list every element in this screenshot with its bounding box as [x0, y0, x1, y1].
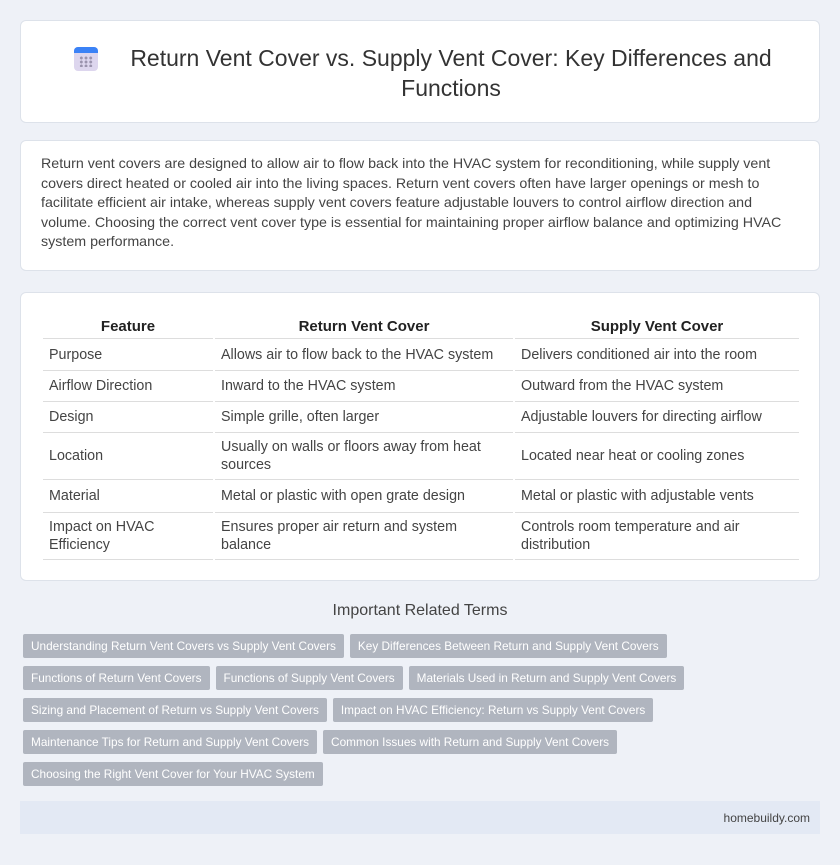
intro text: Return vent covers are designed to allow air to flow back into the HVAC system for reconditioning, while supply vent [41, 156, 770, 172]
comparison table panel: Ensures proper air return and system balance [221, 519, 457, 553]
comparison table panel: Delivers conditioned air into the room [521, 346, 757, 362]
comparison table panel: Material [49, 488, 100, 504]
related terms tags: Understanding Return Vent Covers vs Supply Vent Covers [31, 639, 336, 653]
comparison table panel: Design [49, 409, 94, 425]
related terms tags: Functions of Return Vent Covers [31, 671, 202, 685]
comparison table panel: Airflow Direction [49, 378, 152, 394]
related terms tags: Key Differences Between Return and Supply Vent Covers [358, 639, 659, 653]
comparison table panel: Outward from the HVAC system [521, 378, 723, 394]
intro text [20, 140, 820, 271]
comparison table panel: Purpose [49, 346, 102, 362]
comparison table panel: Supply Vent Cover [591, 318, 723, 335]
comparison table panel: Usually on walls or floors away from heat sources [221, 439, 481, 473]
related terms tags: Maintenance Tips for Return and Supply Vent Covers [31, 735, 309, 749]
comparison table panel: Controls room temperature and air distribution [521, 519, 740, 553]
related terms tags: Materials Used in Return and Supply Vent Covers [417, 671, 676, 685]
comparison table panel: Inward to the HVAC system [221, 378, 396, 394]
comparison table panel: Allows air to flow back to the HVAC system [221, 346, 493, 362]
comparison table panel: Impact on HVAC Efficiency [49, 519, 154, 553]
comparison table panel: Metal or plastic with adjustable vents [521, 488, 754, 504]
footer: homebuildy.com [724, 811, 810, 825]
footer [20, 801, 820, 834]
comparison table panel: Return Vent Cover [299, 318, 429, 335]
comparison table panel: Feature [101, 318, 155, 335]
comparison table panel: Simple grille, often larger [221, 409, 379, 425]
intro text: covers direct heated or cooled air into the living spaces. Return vent covers often have larger openings or mesh to [41, 176, 759, 192]
comparison table panel: Adjustable louvers for directing airflow [521, 409, 762, 425]
title: Return Vent Cover vs. Supply Vent Cover: Key Differences and Functions [130, 45, 772, 101]
icon: calendar [74, 47, 98, 71]
intro text: volume. Choosing the correct vent cover type is essential for maintaining proper airflow balance and optimizing HVAC [41, 214, 781, 230]
intro text: system performance. [41, 234, 174, 250]
related terms tags [23, 634, 684, 786]
related terms heading: Important Related Terms [333, 602, 507, 619]
intro text: facilitate efficient air intake, whereas supply vent covers feature adjustable louvers to control airflow direction and [41, 195, 752, 211]
comparison table panel: Metal or plastic with open grate design [221, 488, 465, 504]
related terms tags: Sizing and Placement of Return vs Supply Vent Covers [31, 703, 319, 717]
comparison table panel [20, 292, 820, 581]
header card [20, 20, 820, 123]
related terms tags: Impact on HVAC Efficiency: Return vs Supply Vent Covers [341, 703, 645, 717]
related terms tags: Choosing the Right Vent Cover for Your HVAC System [31, 767, 315, 781]
related terms tags: Functions of Supply Vent Covers [224, 671, 395, 685]
comparison table panel: Location [49, 448, 103, 464]
comparison table panel: Located near heat or cooling zones [521, 448, 744, 464]
related terms tags: Common Issues with Return and Supply Vent Covers [331, 735, 609, 749]
